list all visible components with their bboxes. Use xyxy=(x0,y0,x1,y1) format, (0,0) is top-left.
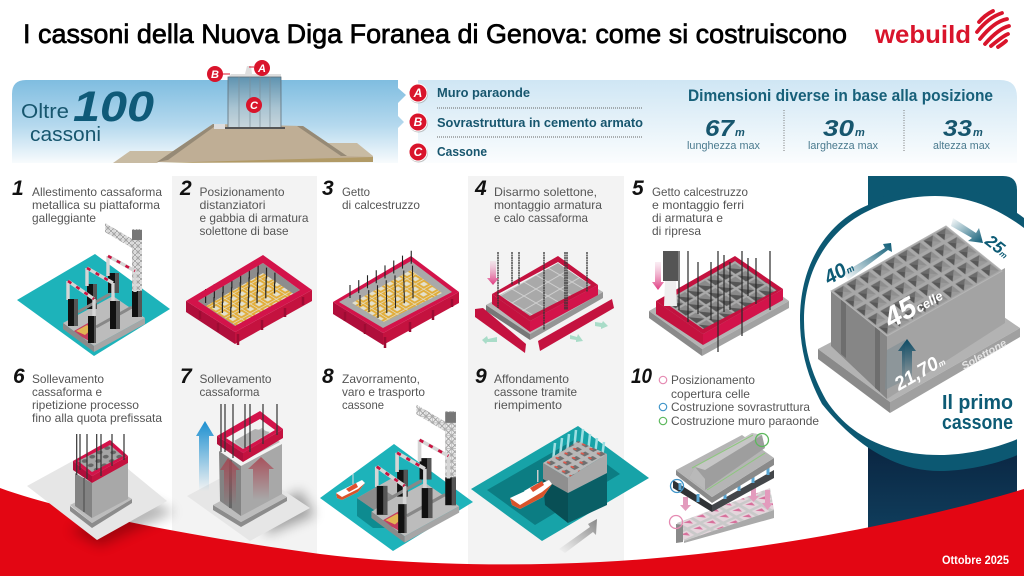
step 3 text: Getto xyxy=(342,185,370,199)
step 1 text: Allestimento cassaforma xyxy=(32,185,162,199)
concrete pump xyxy=(663,251,678,281)
logo: webuild: webuild xyxy=(874,21,971,49)
dimension: height: altezza max xyxy=(933,140,990,152)
arrows: rising inside xyxy=(220,458,240,505)
arrows: covers lowering xyxy=(680,485,773,511)
step 6 text: ripetizione processo xyxy=(32,398,139,412)
step 7 text: Sollevamento xyxy=(200,372,272,386)
step 10: 10 xyxy=(631,365,652,388)
arrow: 25 m xyxy=(951,218,983,243)
step 3: 3 xyxy=(322,177,334,200)
step 6 text: fino alla quota prefissata xyxy=(32,411,162,425)
dimension: width: m xyxy=(855,127,865,139)
arrow: formwork lowering xyxy=(487,261,499,285)
step 2 text xyxy=(200,185,309,238)
date: Ottobre 2025 xyxy=(942,555,1010,567)
step 9 text: Affondamento xyxy=(494,372,569,386)
step 7 text xyxy=(200,372,272,399)
marker B: B xyxy=(211,69,219,81)
caisson xyxy=(214,66,285,129)
step 1 text: galleggiante xyxy=(32,211,96,225)
step 9: 9 xyxy=(475,365,487,388)
step 4 text: montaggio armatura xyxy=(494,198,602,212)
step 8 illustration xyxy=(320,405,473,551)
panel: grey background step 4 and 9 xyxy=(468,176,624,576)
step 2: 2 xyxy=(179,177,192,200)
dark layer xyxy=(673,480,712,512)
step 8: 8 xyxy=(322,365,334,388)
lower slab with cell covers xyxy=(677,488,774,541)
step 4: 4 xyxy=(474,177,487,200)
step 8 text xyxy=(342,372,425,412)
dimension: length: lunghezza max xyxy=(687,140,760,152)
step 6 text xyxy=(32,372,162,425)
step 4 xyxy=(474,177,614,353)
step 7: 7 xyxy=(180,365,193,388)
arrow: transport xyxy=(559,519,597,553)
step 1 illustration xyxy=(17,223,170,356)
label: il primo cassone: Il primo xyxy=(942,391,1013,414)
panel: grey background step 2 and 7 xyxy=(172,176,317,576)
step 6 illustration xyxy=(27,434,175,546)
marker C: C xyxy=(250,100,259,112)
text: oltre 100 cassoni xyxy=(21,83,154,146)
step 5 xyxy=(632,177,789,356)
icon: logo swoosh xyxy=(977,11,1009,47)
dimension: length: m xyxy=(735,127,745,139)
step 9 text: riempimento xyxy=(494,398,562,412)
step 1 text xyxy=(32,185,162,225)
parapet wall xyxy=(689,433,765,490)
step 5 text: di armatura e xyxy=(652,211,723,225)
arrow: blue up xyxy=(196,421,214,491)
boat xyxy=(510,470,552,509)
step 7 xyxy=(180,365,315,541)
panel: first caisson illustration xyxy=(818,218,1020,434)
dimension: width xyxy=(808,115,878,152)
step 4 text xyxy=(494,185,602,225)
breakwater mound xyxy=(113,124,373,163)
step 10 illustration xyxy=(670,433,774,543)
step 2 text: distanziatori xyxy=(200,198,266,212)
step 5 text: e montaggio ferri xyxy=(652,198,744,212)
step 1: 1 xyxy=(12,177,24,200)
text: oltre 100 cassoni: cassoni xyxy=(30,124,101,146)
step 4 illustration xyxy=(475,252,614,353)
blue legs xyxy=(680,467,768,502)
title: I cassoni della Nuova Diga Foranea di Genova: come si costruiscono xyxy=(23,19,847,49)
step 10 list: Costruzione muro paraonde xyxy=(671,414,819,428)
step 2 text: e gabbia di armatura xyxy=(200,211,309,225)
dimension: width: 30 xyxy=(823,115,854,141)
step 8 text: cassone xyxy=(342,398,384,412)
arrow: pour xyxy=(652,262,664,290)
step 4 text: Disarmo solettone, xyxy=(494,185,597,199)
legend xyxy=(409,84,643,162)
step 5 text xyxy=(652,185,748,238)
step 9 xyxy=(471,365,649,553)
label: solettone: Solettone xyxy=(960,337,1009,373)
legend: Cassone xyxy=(437,144,487,159)
step 2 xyxy=(179,177,312,345)
step 1 text: metallica su piattaforma xyxy=(32,198,160,212)
arrow: 21,70 m xyxy=(898,339,916,384)
dimension: height xyxy=(933,115,990,152)
text: oltre 100 cassoni: Oltre xyxy=(21,101,69,123)
step 5: 5 xyxy=(632,177,644,200)
side form right xyxy=(538,299,614,351)
step 10 list xyxy=(659,373,819,428)
step 9 text xyxy=(494,372,577,412)
step 2 illustration xyxy=(186,255,312,345)
step 6 xyxy=(13,365,175,546)
step 8 text: Zavorramento, xyxy=(342,372,420,386)
legend: C xyxy=(414,145,423,159)
step 4 text: e calo cassaforma xyxy=(494,211,588,225)
label: il primo cassone: cassone xyxy=(942,411,1013,434)
red wave footer xyxy=(0,488,1024,576)
dimension: length xyxy=(687,115,760,152)
legend: B xyxy=(414,115,423,129)
step 6 text: Sollevamento xyxy=(32,372,104,386)
top slab xyxy=(676,458,774,503)
step 3 text: di calcestruzzo xyxy=(342,198,420,212)
step 2 text: solettone di base xyxy=(200,224,289,238)
marker A xyxy=(249,60,270,76)
dimension: width: larghezza max xyxy=(808,140,878,152)
legend: A xyxy=(413,86,422,100)
step 8 text: varo e trasporto xyxy=(342,385,425,399)
caisson top cells xyxy=(831,226,1002,336)
boat xyxy=(336,474,365,500)
dimension: height: 33 xyxy=(943,115,972,141)
step 5 text: di ripresa xyxy=(652,224,701,238)
dimension: length: 67 xyxy=(705,115,735,141)
step 10 xyxy=(631,365,819,543)
panel: breakwater section xyxy=(12,60,406,163)
step 10 list: Posizionamento xyxy=(671,373,755,387)
legend: Sovrastruttura in cemento armato xyxy=(437,115,643,130)
label: il primo cassone xyxy=(942,391,1013,434)
text: oltre 100 cassoni: 100 xyxy=(73,83,154,131)
step 6: 6 xyxy=(13,365,25,388)
step 6 text: cassaforma e xyxy=(32,385,102,399)
step 8 xyxy=(320,365,473,551)
marker C xyxy=(246,97,262,113)
step 2 text: Posizionamento xyxy=(200,185,285,199)
step 3 illustration xyxy=(333,251,459,348)
label: 40 m: 40m xyxy=(820,255,858,290)
step 10 list: Costruzione sovrastruttura xyxy=(671,400,810,414)
dimensions heading: Dimensioni diverse in base alla posizione xyxy=(688,86,993,105)
marker B xyxy=(207,66,230,82)
arrows: green outward xyxy=(482,321,608,344)
label: 25 m: 25m xyxy=(981,231,1014,262)
label: 21,70 m: 21,70m xyxy=(890,350,949,396)
step 10 list: copertura celle xyxy=(671,387,750,401)
step 3 text xyxy=(342,185,420,212)
logo: webuild xyxy=(874,11,1009,49)
step 9 illustration xyxy=(471,426,649,553)
marker A: A xyxy=(257,63,266,75)
step 3 xyxy=(322,177,459,348)
arrow: 40 m xyxy=(843,243,892,280)
panel: first caisson dark backdrop xyxy=(800,176,1024,540)
step 1 xyxy=(12,177,170,356)
label: 45 celle: 45celle xyxy=(878,277,947,336)
dimension: height: m xyxy=(973,127,983,139)
step 5 text: Getto calcestruzzo xyxy=(652,185,748,199)
step 7 text: cassaforma xyxy=(200,385,260,399)
step 5 illustration xyxy=(649,251,789,356)
caisson base xyxy=(818,280,1020,413)
step 9 text: cassone tramite xyxy=(494,385,577,399)
step 7 illustration xyxy=(187,404,315,541)
panel: legend and dimensions xyxy=(409,80,1017,163)
caisson walls xyxy=(831,268,1005,399)
side form left xyxy=(475,308,526,353)
legend: Muro paraonde xyxy=(437,85,530,100)
